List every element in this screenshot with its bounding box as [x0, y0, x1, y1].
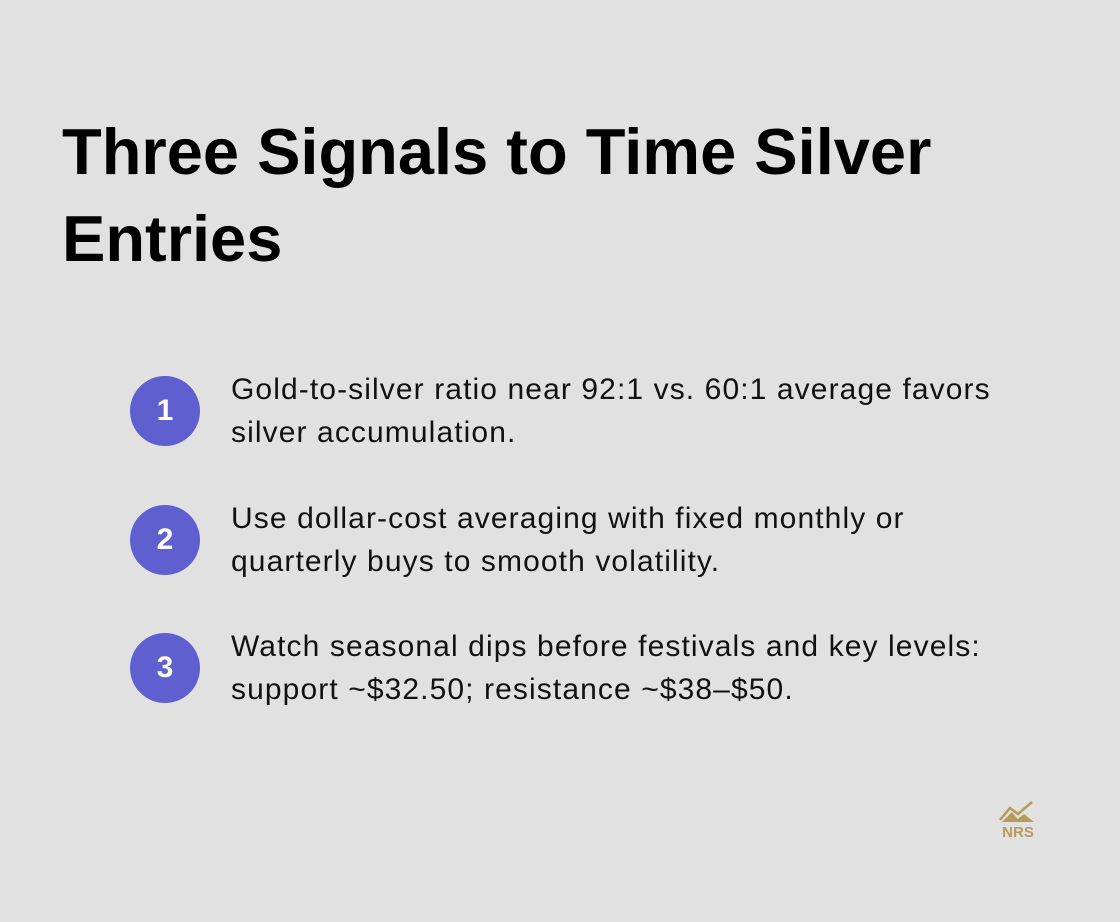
icon: number 2	[130, 505, 200, 575]
text 1: Gold-to-silver ratio near 92:1 vs. 60:1 average favors	[231, 373, 991, 406]
text 2: Use dollar-cost averaging with fixed monthly or	[231, 502, 905, 535]
text 1: silver accumulation.	[231, 416, 516, 449]
text 3: support ~$32.50; resistance ~$38–$50.	[231, 673, 794, 706]
icon: number 1: 1	[157, 394, 173, 427]
icon: number 3	[130, 633, 200, 703]
item 1	[130, 373, 991, 449]
item 2	[130, 502, 905, 578]
title: Three Signals to Time Silver	[62, 115, 931, 188]
title: Entries	[62, 202, 282, 275]
icon: number 1	[130, 376, 200, 446]
text 3	[231, 630, 981, 706]
text 1	[231, 373, 991, 449]
icon: number 2: 2	[157, 523, 173, 556]
logo: NRS	[999, 801, 1034, 840]
text 2	[231, 502, 905, 578]
item 3	[130, 630, 981, 706]
title	[62, 115, 931, 275]
text 2: quarterly buys to smooth volatility.	[231, 545, 720, 578]
icon: number 3: 3	[157, 651, 173, 684]
text 3: Watch seasonal dips before festivals and key levels:	[231, 630, 981, 663]
